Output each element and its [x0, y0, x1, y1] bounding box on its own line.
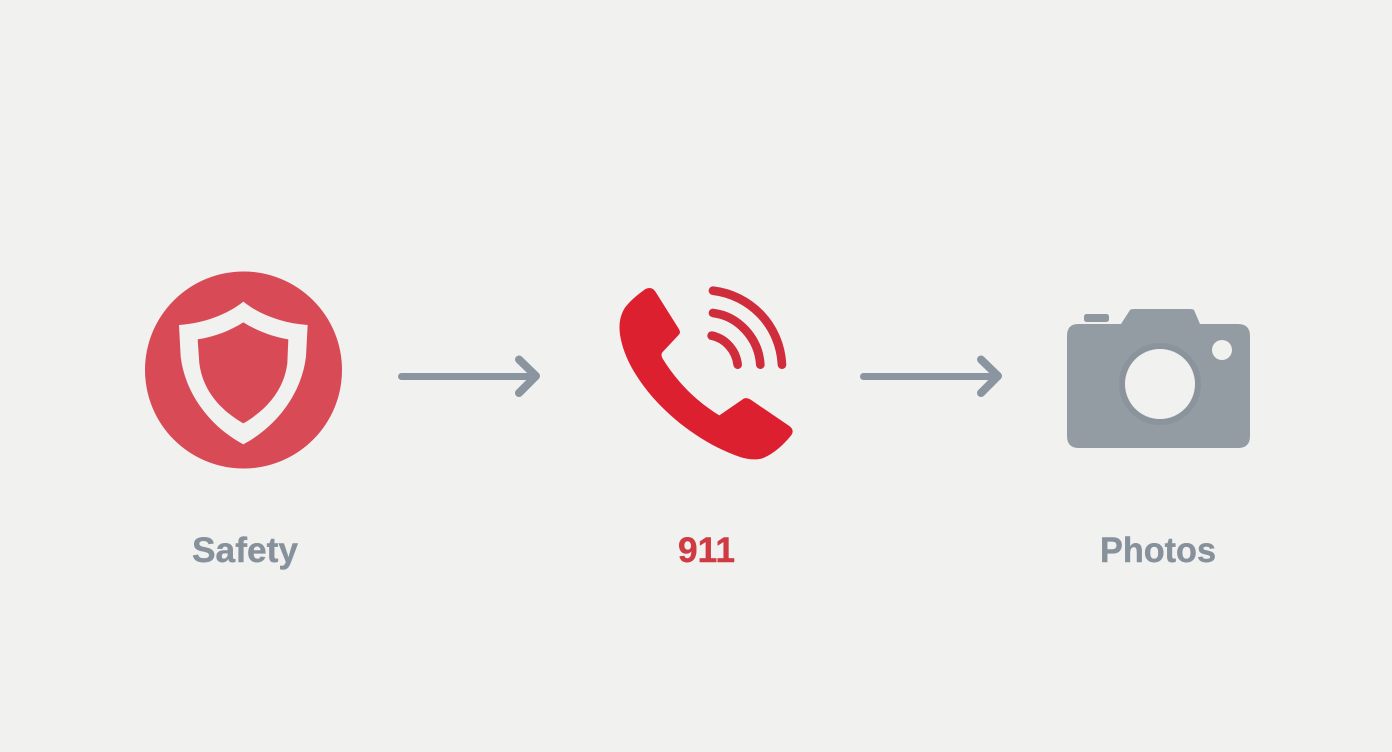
- label: Safety: Safety: [192, 531, 299, 570]
- arrow: safety to 911: [402, 360, 536, 393]
- camera shutter button: [1084, 314, 1109, 322]
- icon: shield in red circle: [145, 272, 342, 468]
- camera body: [1067, 309, 1250, 448]
- arrow: 911 to photos: [864, 360, 998, 393]
- icon: phone handset with signal waves: [619, 288, 793, 459]
- phone handset: [619, 288, 793, 459]
- label: 911: 911: [678, 531, 735, 570]
- icon: camera: [1067, 309, 1250, 448]
- camera lens: [1119, 343, 1201, 425]
- label: Photos: Photos: [1100, 531, 1216, 570]
- signal waves: [712, 291, 782, 365]
- camera flash: [1212, 340, 1232, 360]
